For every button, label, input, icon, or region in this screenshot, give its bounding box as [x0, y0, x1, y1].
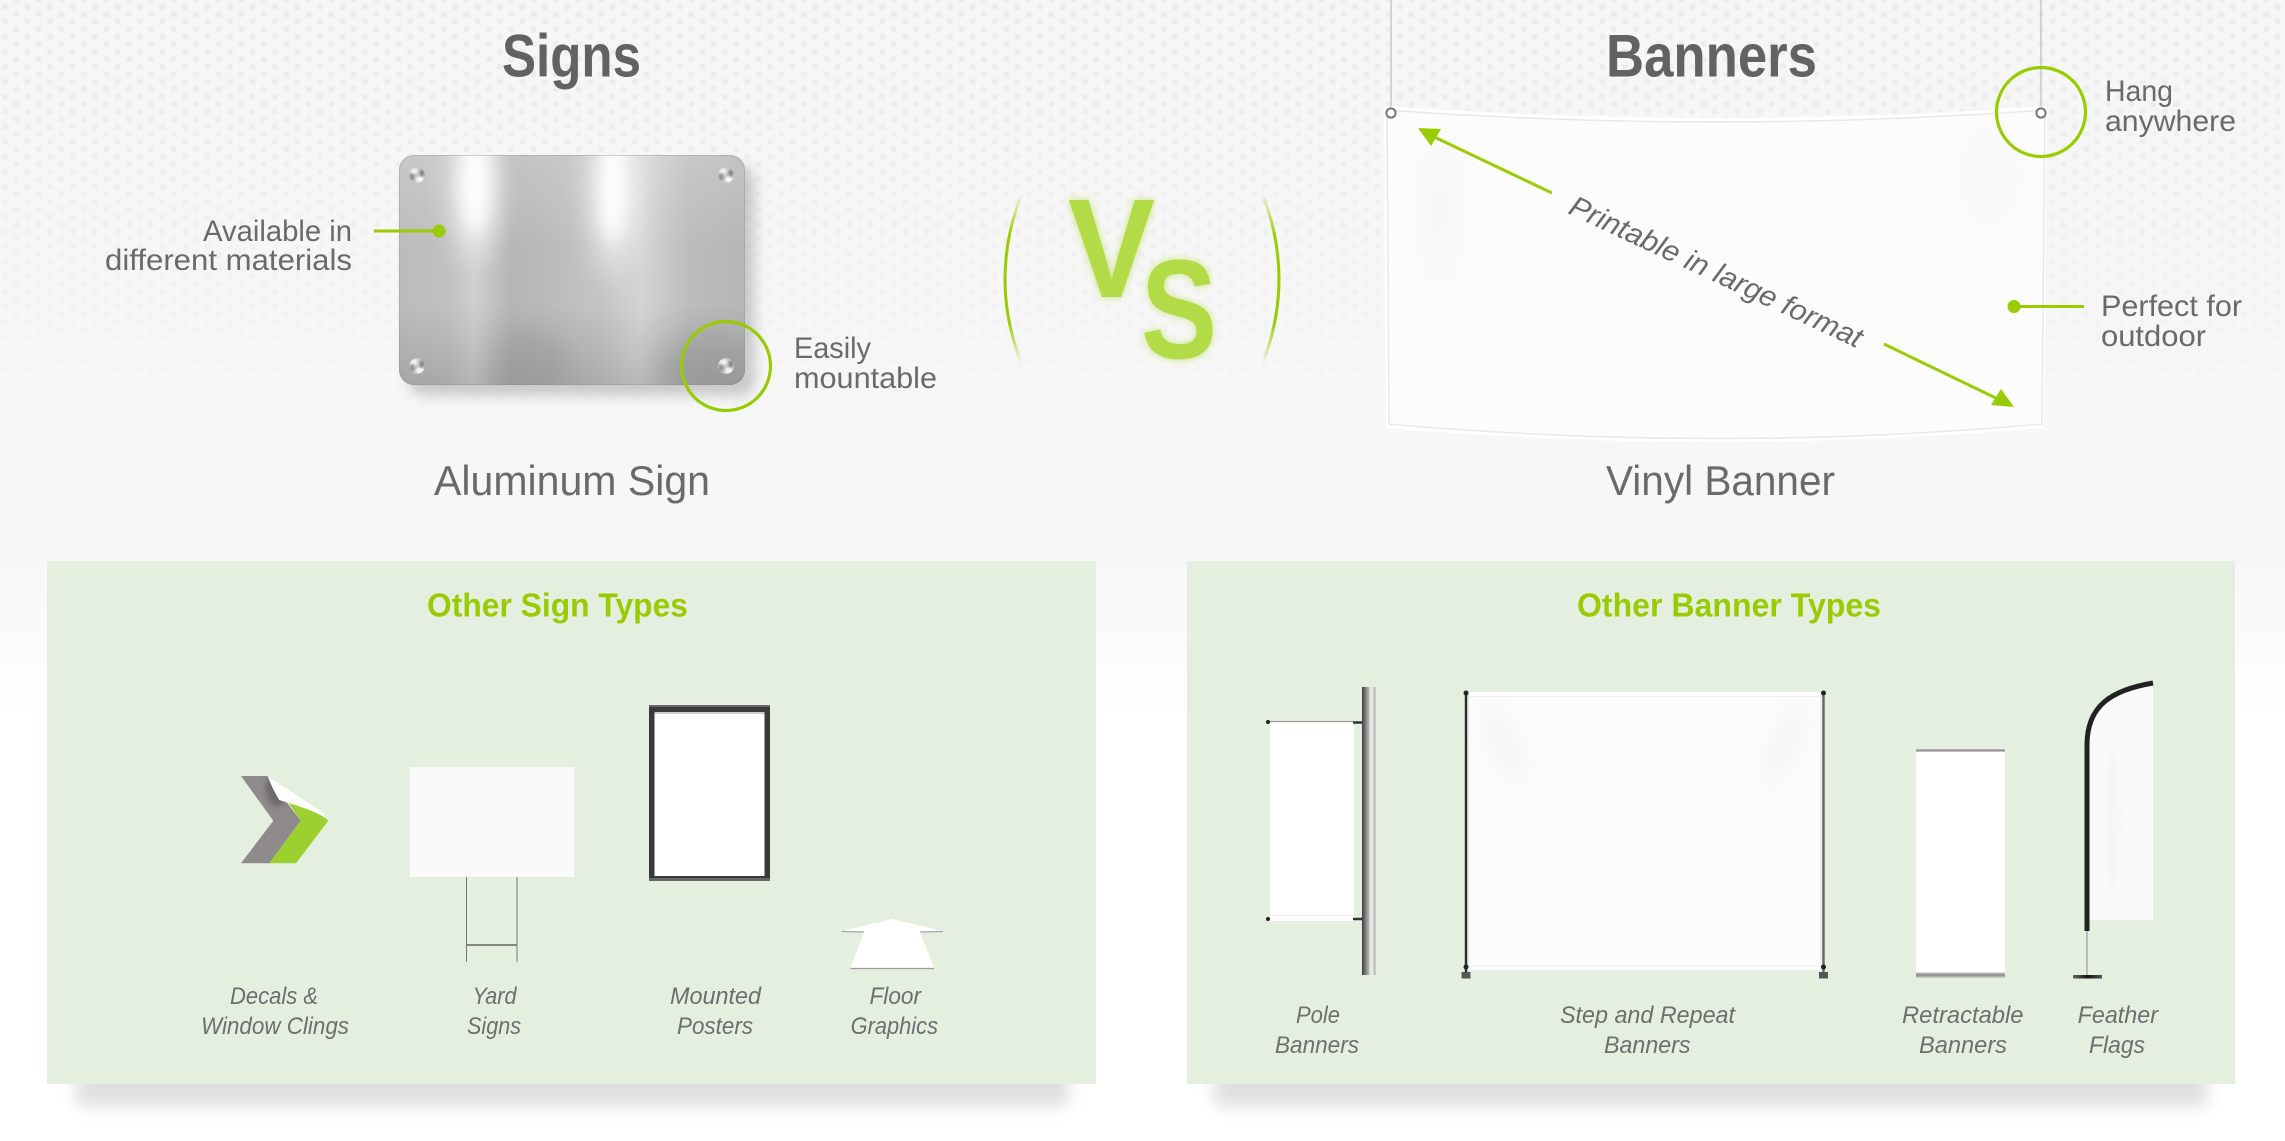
- icon: retractable banner: [1916, 749, 2005, 978]
- caption: Feather Flags: Feather: [2078, 1002, 2159, 1029]
- caption: Vinyl Banner: Vinyl Banner: [1606, 457, 1835, 504]
- caption: Pole Banners: Pole: [1296, 1002, 1340, 1029]
- callout: Printable in large format: [1418, 128, 2014, 407]
- caption: Decals & Window Clings: Decals &: [230, 983, 318, 1010]
- callout: Available in different materials: different materials: [105, 244, 352, 277]
- callout: Available in different materials: Available in: [203, 215, 352, 248]
- VS emblem: V: [1068, 169, 1155, 327]
- heading: Banners: Banners: [1606, 22, 1817, 90]
- caption: Pole Banners: [1275, 1002, 1359, 1059]
- icon: step and repeat banner: [1462, 690, 1828, 978]
- caption: Retractable Banners: [1902, 1002, 2024, 1059]
- panel: other sign types: [47, 561, 1096, 1106]
- caption: Step and Repeat Banners: Step and Repeat: [1560, 1002, 1736, 1029]
- caption: Mounted Posters: Mounted: [670, 983, 762, 1010]
- VS emblem: V: [1068, 169, 1155, 327]
- VS emblem: S: [1141, 230, 1217, 388]
- caption: Decals & Window Clings: [201, 983, 349, 1040]
- aluminum sign plate: [399, 155, 760, 402]
- callout: Printable in large format: Printable in large format: [1564, 190, 1869, 355]
- VS emblem: S: [1141, 230, 1217, 388]
- caption: Pole Banners: Banners: [1275, 1032, 1359, 1059]
- callout: Easily mountable: Easily: [794, 332, 871, 365]
- caption: Floor Graphics: Floor: [870, 983, 922, 1010]
- icon: mounted poster: [649, 705, 770, 881]
- caption: Feather Flags: [2078, 1002, 2159, 1059]
- callout: Hang anywhere: [1996, 68, 2236, 156]
- panel heading: Other Sign Types: Other Sign Types: [427, 586, 688, 624]
- caption: Floor Graphics: Graphics: [851, 1013, 938, 1040]
- callout: Perfect for outdoor: [2008, 290, 2242, 353]
- hanging vinyl banner: [1384, 0, 2047, 442]
- icon: decal with peeled corner: [241, 770, 328, 863]
- icon: yard sign: [410, 767, 574, 962]
- callout: Hang anywhere: anywhere: [2105, 105, 2236, 138]
- callout: Easily mountable: [682, 322, 937, 410]
- caption: Step and Repeat Banners: Banners: [1604, 1032, 1690, 1059]
- callout: Available in different materials: [105, 215, 446, 277]
- caption: Feather Flags: Flags: [2089, 1032, 2145, 1059]
- caption: Yard Signs: Signs: [467, 1013, 521, 1040]
- caption: Floor Graphics: [851, 983, 938, 1040]
- callout: Perfect for outdoor: Perfect for: [2101, 290, 2242, 323]
- callout: Easily mountable: mountable: [794, 362, 937, 395]
- caption: Retractable Banners: Banners: [1919, 1032, 2007, 1059]
- callout: Hang anywhere: Hang: [2105, 75, 2173, 108]
- VS emblem: [1005, 169, 1279, 388]
- caption: Aluminum Sign: Aluminum Sign: [434, 457, 710, 504]
- caption: Mounted Posters: [670, 983, 762, 1040]
- heading: Signs: Signs: [502, 22, 641, 90]
- caption: Yard Signs: Yard: [472, 983, 517, 1010]
- caption: Yard Signs: [467, 983, 521, 1040]
- caption: Retractable Banners: Retractable: [1902, 1002, 2024, 1029]
- dotted background pattern: [2, 0, 2280, 162]
- panel heading: Other Banner Types: Other Banner Types: [1577, 586, 1881, 624]
- caption: Mounted Posters: Posters: [677, 1013, 753, 1040]
- caption: Step and Repeat Banners: [1560, 1002, 1736, 1059]
- icon: floor graphic arrow: [842, 919, 943, 968]
- caption: Decals & Window Clings: Window Clings: [201, 1013, 349, 1040]
- icon: feather flag: [2073, 683, 2153, 978]
- callout: Perfect for outdoor: outdoor: [2101, 320, 2206, 353]
- icon: pole banner: [1266, 687, 1376, 975]
- panel: other banner types: [1187, 561, 2235, 1106]
